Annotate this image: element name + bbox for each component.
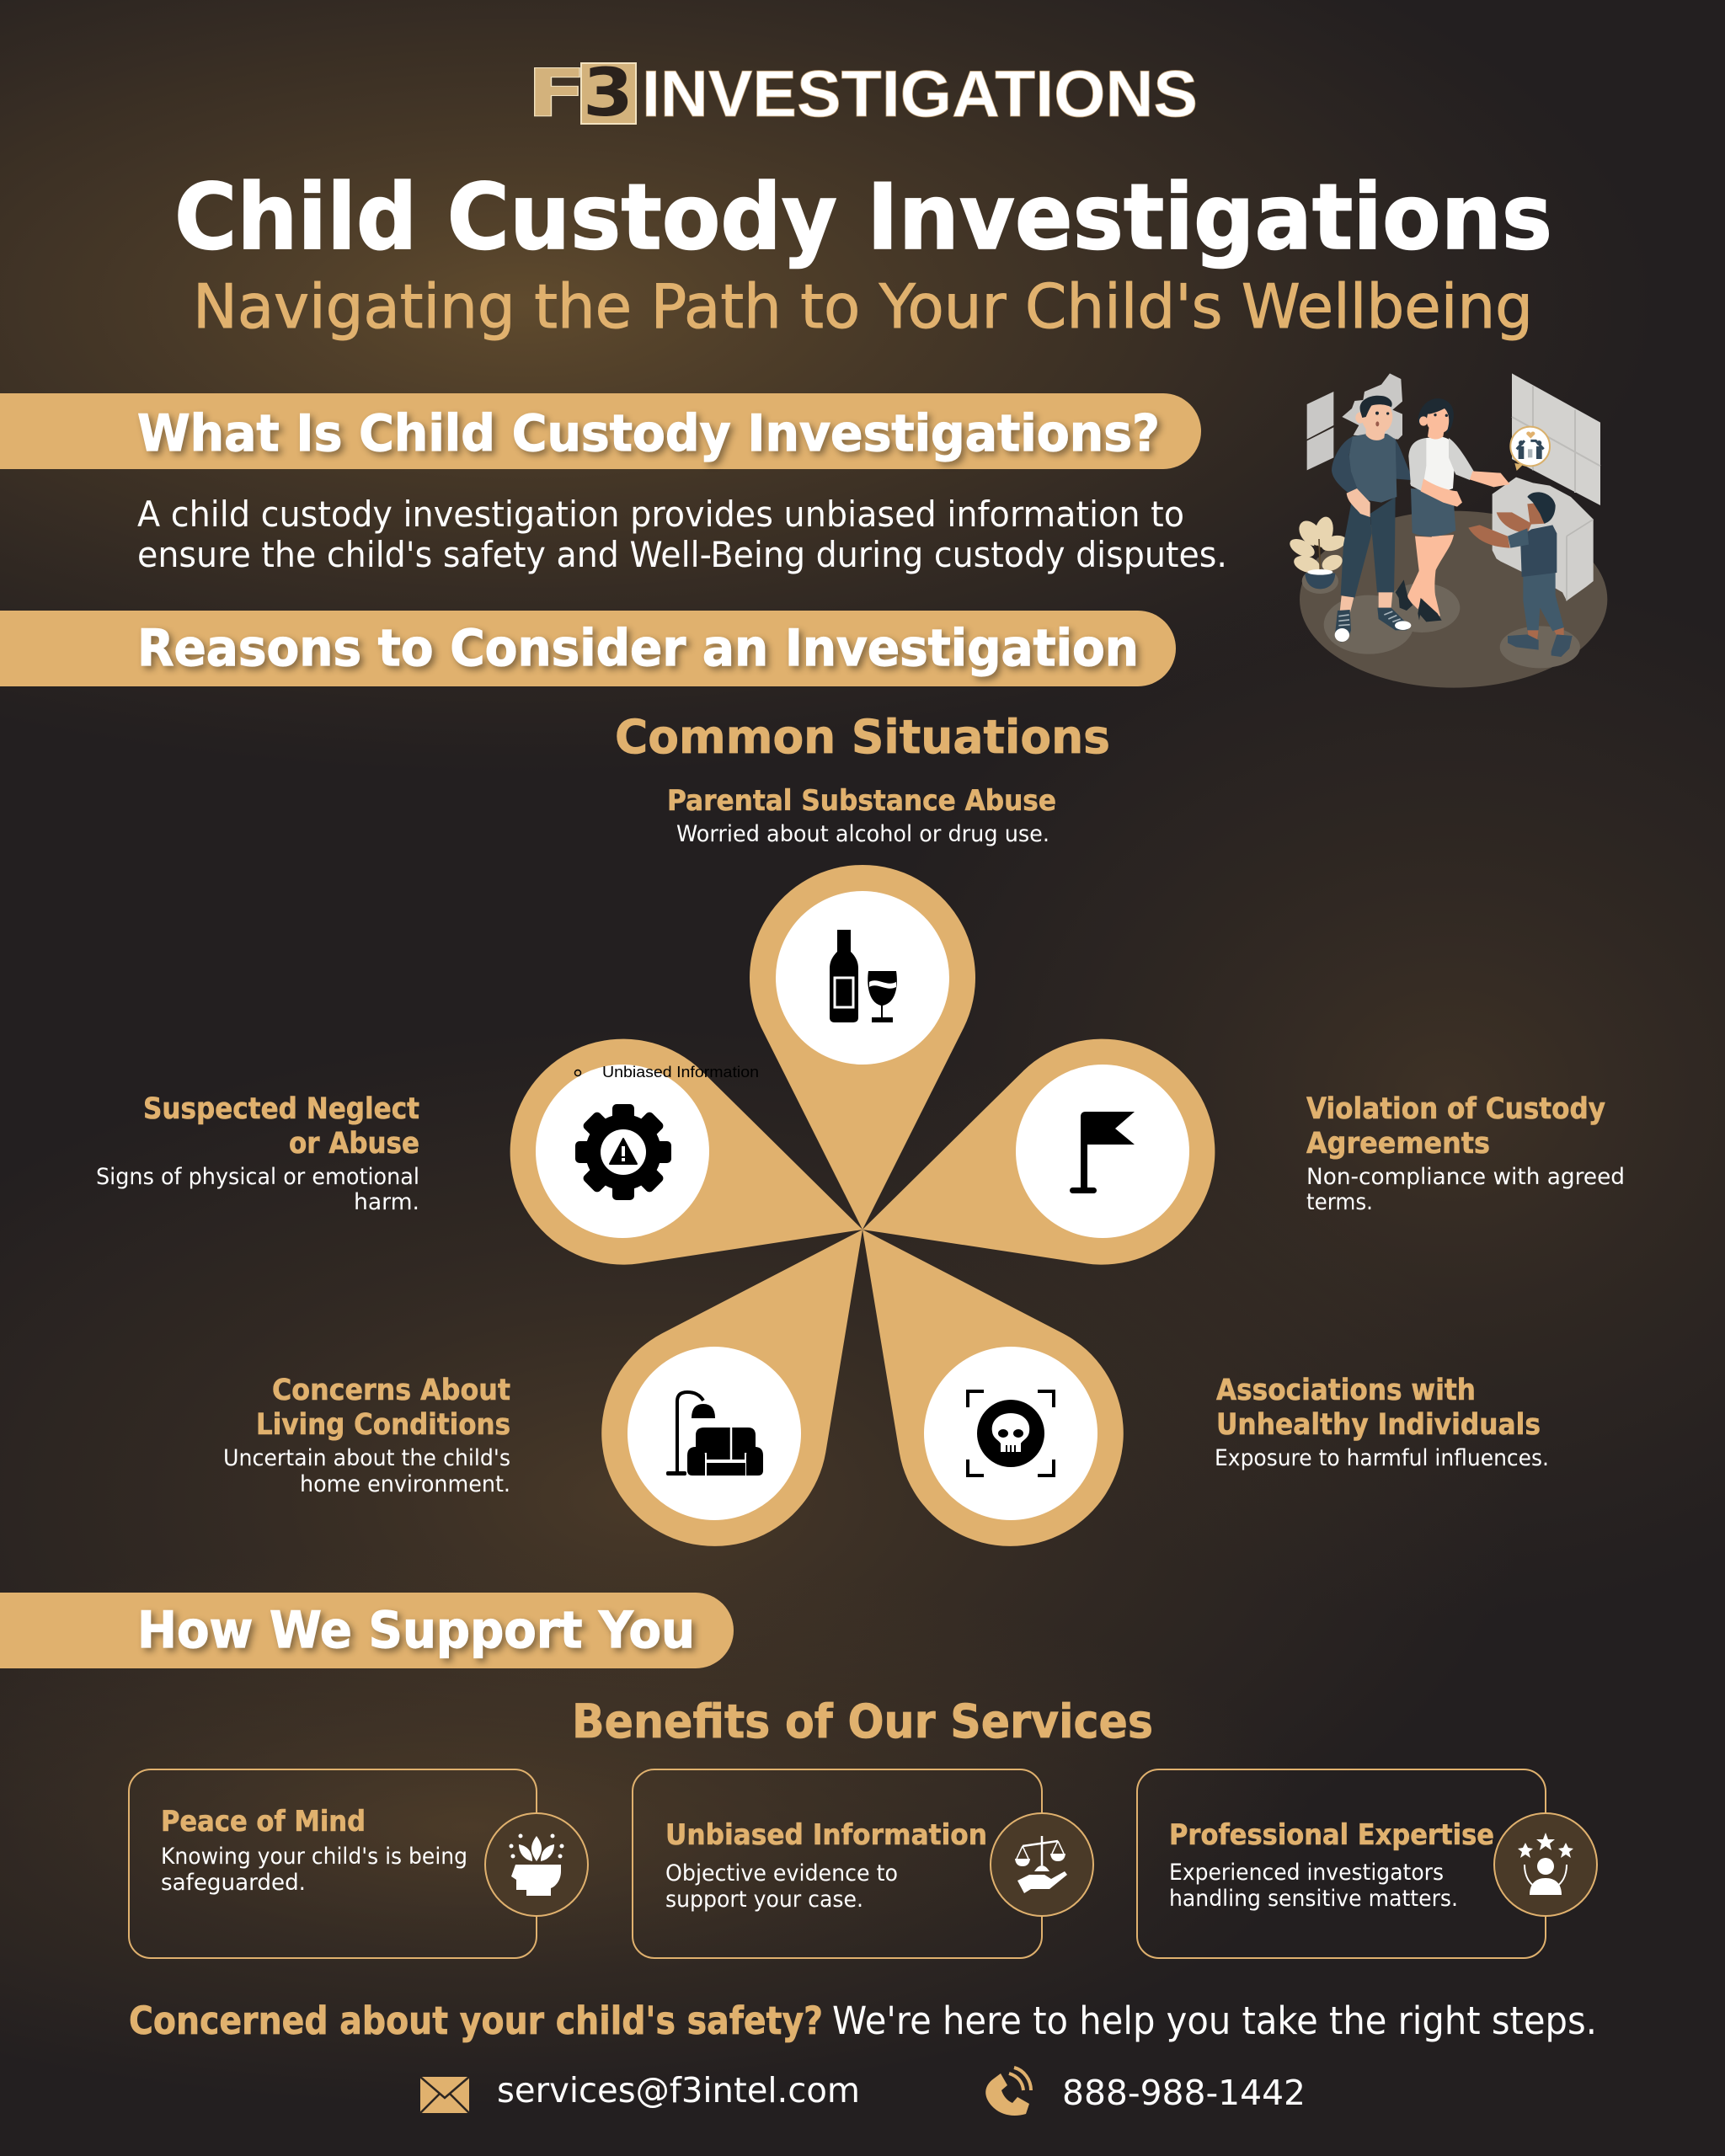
logo: 3 bbox=[583, 56, 633, 131]
banner: reasons bbox=[0, 611, 1176, 686]
pin: bottom left, sofa bbox=[557, 1163, 953, 1591]
cabinet bbox=[1493, 478, 1594, 600]
near arm bbox=[1332, 436, 1358, 493]
situation: living conditions bbox=[223, 1374, 510, 1497]
near arm bbox=[1468, 525, 1510, 548]
situation: violation of agreements bbox=[1306, 1092, 1625, 1215]
child bbox=[1468, 492, 1573, 657]
shoes bbox=[1335, 610, 1351, 643]
icon: phone bbox=[985, 2068, 1031, 2116]
situation: living conditions: Uncertain about the child's bbox=[223, 1445, 510, 1471]
shirt bbox=[1520, 525, 1557, 577]
banner: what is: What Is Child Custody Investigations? bbox=[137, 404, 1160, 463]
hand bbox=[1347, 488, 1370, 517]
icon: envelope bbox=[420, 2077, 469, 2113]
situation: parental substance abuse: Parental Substance Abuse bbox=[667, 784, 1056, 818]
blouse bbox=[1410, 436, 1455, 492]
situation: unhealthy associations bbox=[1215, 1374, 1549, 1471]
card: professional expertise: Professional Expertise bbox=[1169, 1818, 1494, 1852]
legs bbox=[1407, 535, 1454, 609]
title: Child Custody Investigations bbox=[174, 165, 1552, 270]
situation: living conditions: Living Conditions bbox=[256, 1408, 510, 1442]
head bbox=[1527, 503, 1546, 525]
pin: top, bottle and glass bbox=[750, 865, 975, 1230]
logo: INVESTIGATIONS bbox=[642, 56, 1198, 131]
intro text: A child custody investigation provides unbiased information to bbox=[137, 494, 1184, 535]
floor spots bbox=[1324, 595, 1413, 654]
far arm bbox=[1394, 438, 1413, 480]
banner: reasons: Reasons to Consider an Investigation bbox=[137, 619, 1139, 678]
woman bbox=[1396, 398, 1510, 622]
sleeves bbox=[1408, 438, 1426, 491]
banner: how we support you: How We Support You bbox=[137, 1601, 695, 1660]
far arm bbox=[1497, 512, 1531, 533]
skirt bbox=[1411, 488, 1455, 536]
pin: right, flag bbox=[828, 1010, 1244, 1337]
man bbox=[1332, 396, 1413, 643]
situation: neglect or abuse: Signs of physical or emotional bbox=[96, 1164, 419, 1190]
icon: expert with stars bbox=[1518, 1833, 1573, 1895]
contact: phone bbox=[985, 2068, 1306, 2116]
pin diagram bbox=[481, 865, 1244, 1591]
call to action: Concerned about your child's safety? bbox=[129, 1999, 823, 2043]
situation: violation of agreements: Non-compliance with agreed bbox=[1306, 1164, 1625, 1190]
icon: scales and hand bbox=[1015, 1836, 1067, 1893]
card: peace of mind: Peace of Mind bbox=[161, 1805, 366, 1838]
situation: neglect or abuse: Suspected Neglect bbox=[143, 1092, 419, 1126]
situation: neglect or abuse bbox=[96, 1092, 419, 1215]
subtitle: Navigating the Path to Your Child's Wellbeing bbox=[193, 271, 1533, 342]
neck bbox=[1366, 425, 1386, 440]
card: peace of mind: Knowing your child's is being bbox=[161, 1844, 467, 1870]
banner: what is bbox=[0, 393, 1201, 469]
situation: unhealthy associations: Associations with bbox=[1216, 1374, 1476, 1407]
arms bbox=[1421, 478, 1462, 507]
pin: bottom right, skull bbox=[772, 1163, 1168, 1591]
situation: neglect or abuse: or Abuse bbox=[289, 1127, 419, 1161]
speech bubble bbox=[1510, 427, 1550, 471]
card: unbiased information: support your case. bbox=[665, 1886, 863, 1913]
situation: violation of agreements: Violation of Custody bbox=[1306, 1092, 1605, 1126]
card: unbiased information bbox=[633, 1769, 1093, 1958]
pants bbox=[1523, 573, 1564, 631]
situation: violation of agreements: Agreements bbox=[1306, 1127, 1490, 1161]
heading: common situations: Common Situations bbox=[615, 710, 1110, 764]
situation: living conditions: Concerns About bbox=[272, 1374, 510, 1407]
card: unbiased information: Objective evidence to bbox=[665, 1860, 898, 1886]
plant bbox=[1287, 515, 1348, 589]
icon: head with plant bbox=[509, 1834, 564, 1896]
legs bbox=[1341, 499, 1372, 598]
situation: living conditions: home environment. bbox=[300, 1471, 510, 1497]
card: unbiased information: Unbiased Information bbox=[665, 1818, 987, 1852]
card: professional expertise bbox=[1137, 1769, 1597, 1958]
contact: phone: 888-988-1442 bbox=[1062, 2073, 1306, 2113]
shoes bbox=[1508, 634, 1539, 650]
heels bbox=[1396, 579, 1413, 611]
situation: parental substance abuse: Worried about alcohol or drug use. bbox=[676, 821, 1049, 847]
ankles bbox=[1527, 629, 1539, 641]
pin: left, gear warning bbox=[481, 1010, 897, 1337]
contact: email: services@f3intel.com bbox=[497, 2070, 860, 2111]
sleeve bbox=[1508, 528, 1529, 548]
situation: parental substance abuse bbox=[667, 784, 1056, 847]
situation: violation of agreements: terms. bbox=[1306, 1189, 1373, 1215]
logo: F bbox=[526, 56, 587, 132]
intro text bbox=[137, 494, 1227, 575]
ankles bbox=[1340, 595, 1354, 613]
floor bbox=[1300, 511, 1607, 688]
call to action: We're here to help you take the right steps. bbox=[832, 1999, 1597, 2043]
call to action bbox=[129, 1999, 1597, 2043]
card: peace of mind: safeguarded. bbox=[161, 1870, 306, 1896]
wall shelves bbox=[1307, 373, 1600, 505]
heading: benefits: Benefits of Our Services bbox=[572, 1694, 1153, 1748]
illustration: family bbox=[1287, 373, 1607, 688]
situation: neglect or abuse: harm. bbox=[354, 1189, 419, 1215]
head bbox=[1362, 399, 1392, 435]
stray label: unbiased information: Unbiased Information bbox=[602, 1064, 759, 1081]
situation: unhealthy associations: Unhealthy Individuals bbox=[1216, 1408, 1541, 1442]
torso bbox=[1348, 434, 1397, 503]
card: professional expertise: handling sensitive matters. bbox=[1169, 1886, 1458, 1912]
intro text: ensure the child's safety and Well-Being during custody disputes. bbox=[137, 534, 1227, 575]
neck and head bbox=[1428, 427, 1445, 439]
situation: unhealthy associations: Exposure to harmful influences. bbox=[1215, 1445, 1549, 1471]
card: professional expertise: Experienced investigators bbox=[1169, 1860, 1444, 1886]
banner: how we support you bbox=[0, 1593, 734, 1668]
card: peace of mind bbox=[129, 1769, 588, 1958]
